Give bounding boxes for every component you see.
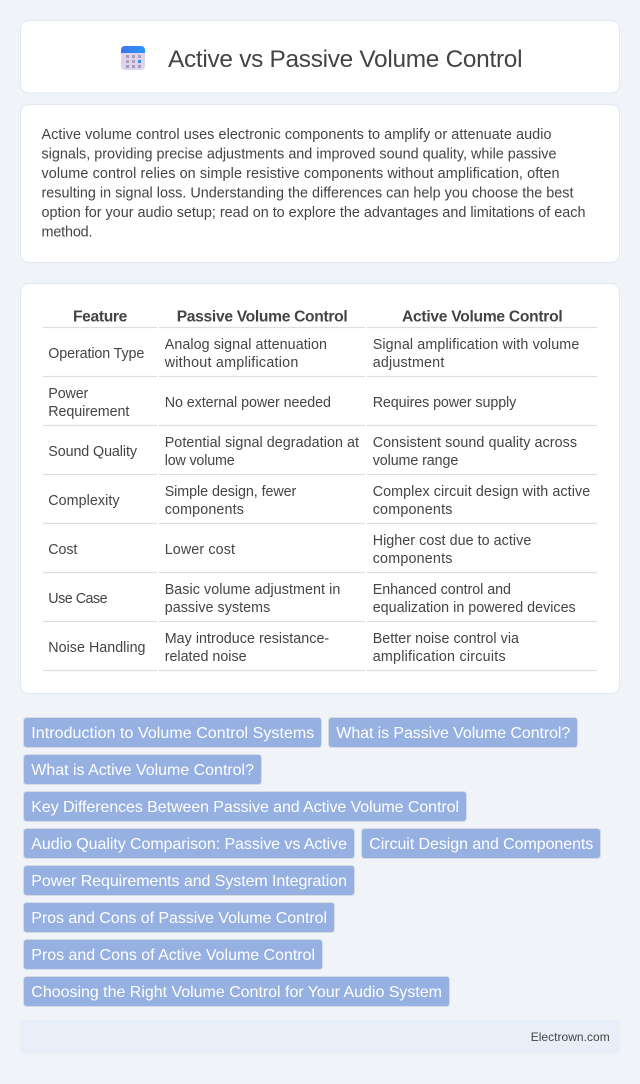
row: noise handling: related noise: [165, 649, 247, 665]
row: cost: Higher cost due to active: [373, 533, 531, 549]
row: cost: Cost: [48, 542, 77, 558]
row: cost: components: [373, 551, 452, 567]
row: cost: Lower cost: [165, 542, 235, 558]
tag: what is passive: [328, 718, 578, 748]
row: use case: passive systems: [165, 600, 270, 616]
tag: key differences: [24, 792, 466, 822]
tag: introduction: Introduction to Volume Control Systems: [31, 725, 314, 742]
row: complexity: components: [373, 502, 452, 518]
footer: Electrown.com: [531, 1030, 610, 1044]
row: complexity: Complexity: [48, 493, 120, 509]
tag: what is active: What is Active Volume Control?: [31, 762, 254, 779]
intro text block: volume control relies on simple resistive components without amplification, often: [42, 166, 560, 182]
row: complexity: Simple design, fewer: [165, 484, 297, 500]
table header row: Feature: [73, 309, 128, 326]
icon: calendar: [121, 46, 145, 70]
tag: power requirements: [24, 866, 354, 896]
tag: circuit design: Circuit Design and Components: [369, 836, 593, 853]
intro text block: [42, 127, 586, 240]
row: power requirement: No external power needed: [165, 395, 331, 411]
table header row: [73, 309, 563, 326]
tag: power requirements: Power Requirements and System Integration: [31, 873, 347, 890]
intro text block: option for your audio setup; read on to explore the advantages and limitations of each: [42, 205, 586, 221]
row: use case: Enhanced control and: [373, 582, 511, 598]
row: use case: [48, 582, 576, 616]
tag: pros and cons active: [24, 940, 322, 970]
intro text block: resulting in signal loss. Understanding the differences can help you choose the best: [42, 186, 574, 202]
row: sound quality: Potential signal degradation at: [165, 435, 359, 451]
tag: pros and cons passive: [24, 902, 334, 932]
tag: what is active: [24, 754, 262, 784]
row: complexity: Complex circuit design with active: [373, 484, 590, 500]
tag: what is passive: What is Passive Volume Control?: [336, 725, 570, 742]
row: operation type: Operation Type: [48, 346, 144, 362]
tag: introduction: [24, 718, 322, 748]
row: use case: Use Case: [48, 591, 108, 607]
row: sound quality: Consistent sound quality across: [373, 435, 577, 451]
row: noise handling: amplification circuits: [373, 649, 506, 665]
row: noise handling: Noise Handling: [48, 640, 146, 656]
row: operation type: adjustment: [373, 355, 444, 371]
row: operation type: Analog signal attenuation: [165, 337, 327, 353]
row: power requirement: [48, 386, 517, 420]
row: sound quality: [48, 435, 577, 469]
row: complexity: components: [165, 502, 244, 518]
table header row: Active Volume Control: [402, 309, 563, 326]
tag: circuit design: [362, 828, 600, 858]
topic tags: [24, 718, 600, 1006]
row: power requirement: Requires power supply: [373, 395, 517, 411]
row: power requirement: Power: [48, 386, 89, 402]
tag: key differences: Key Differences Between Passive and Active Volume Control: [31, 799, 459, 816]
row: sound quality: volume range: [373, 453, 458, 469]
intro text block: method.: [42, 224, 92, 240]
row: cost: [48, 533, 531, 567]
panel: comparison table: [20, 284, 620, 694]
row: sound quality: Sound Quality: [48, 444, 138, 460]
row: noise handling: Better noise control via: [373, 631, 519, 647]
intro text block: Active volume control uses electronic components to amplify or attenuate audio: [42, 127, 552, 143]
row: operation type: [48, 337, 579, 371]
tag: choosing: [24, 976, 450, 1006]
table header row: Passive Volume Control: [177, 309, 348, 326]
intro text block: signals, providing precise adjustments and improved sound quality, while passive: [42, 146, 556, 162]
row: noise handling: May introduce resistance-: [165, 631, 329, 647]
tag: pros and cons passive: Pros and Cons of Passive Volume Control: [31, 910, 327, 927]
row: operation type: without amplification: [164, 355, 298, 371]
tag: audio quality: Audio Quality Comparison: Passive vs Active: [31, 836, 347, 853]
row: sound quality: low volume: [165, 453, 235, 469]
title: Active vs Passive Volume Control: [168, 46, 522, 73]
footer: [20, 1020, 620, 1054]
row: use case: equalization in powered devices: [373, 600, 576, 616]
tag: audio quality: [24, 828, 354, 858]
tag: pros and cons active: Pros and Cons of Active Volume Control: [31, 947, 315, 964]
row: complexity: [48, 484, 590, 518]
panel: title header: [20, 20, 620, 93]
row: use case: Basic volume adjustment in: [165, 582, 340, 598]
row: operation type: Signal amplification with volume: [373, 337, 579, 353]
panel: introduction: [20, 104, 620, 262]
row: noise handling: [48, 631, 519, 665]
row: power requirement: Requirement: [48, 404, 129, 420]
tag: choosing: Choosing the Right Volume Control for Your Audio System: [31, 984, 442, 1001]
